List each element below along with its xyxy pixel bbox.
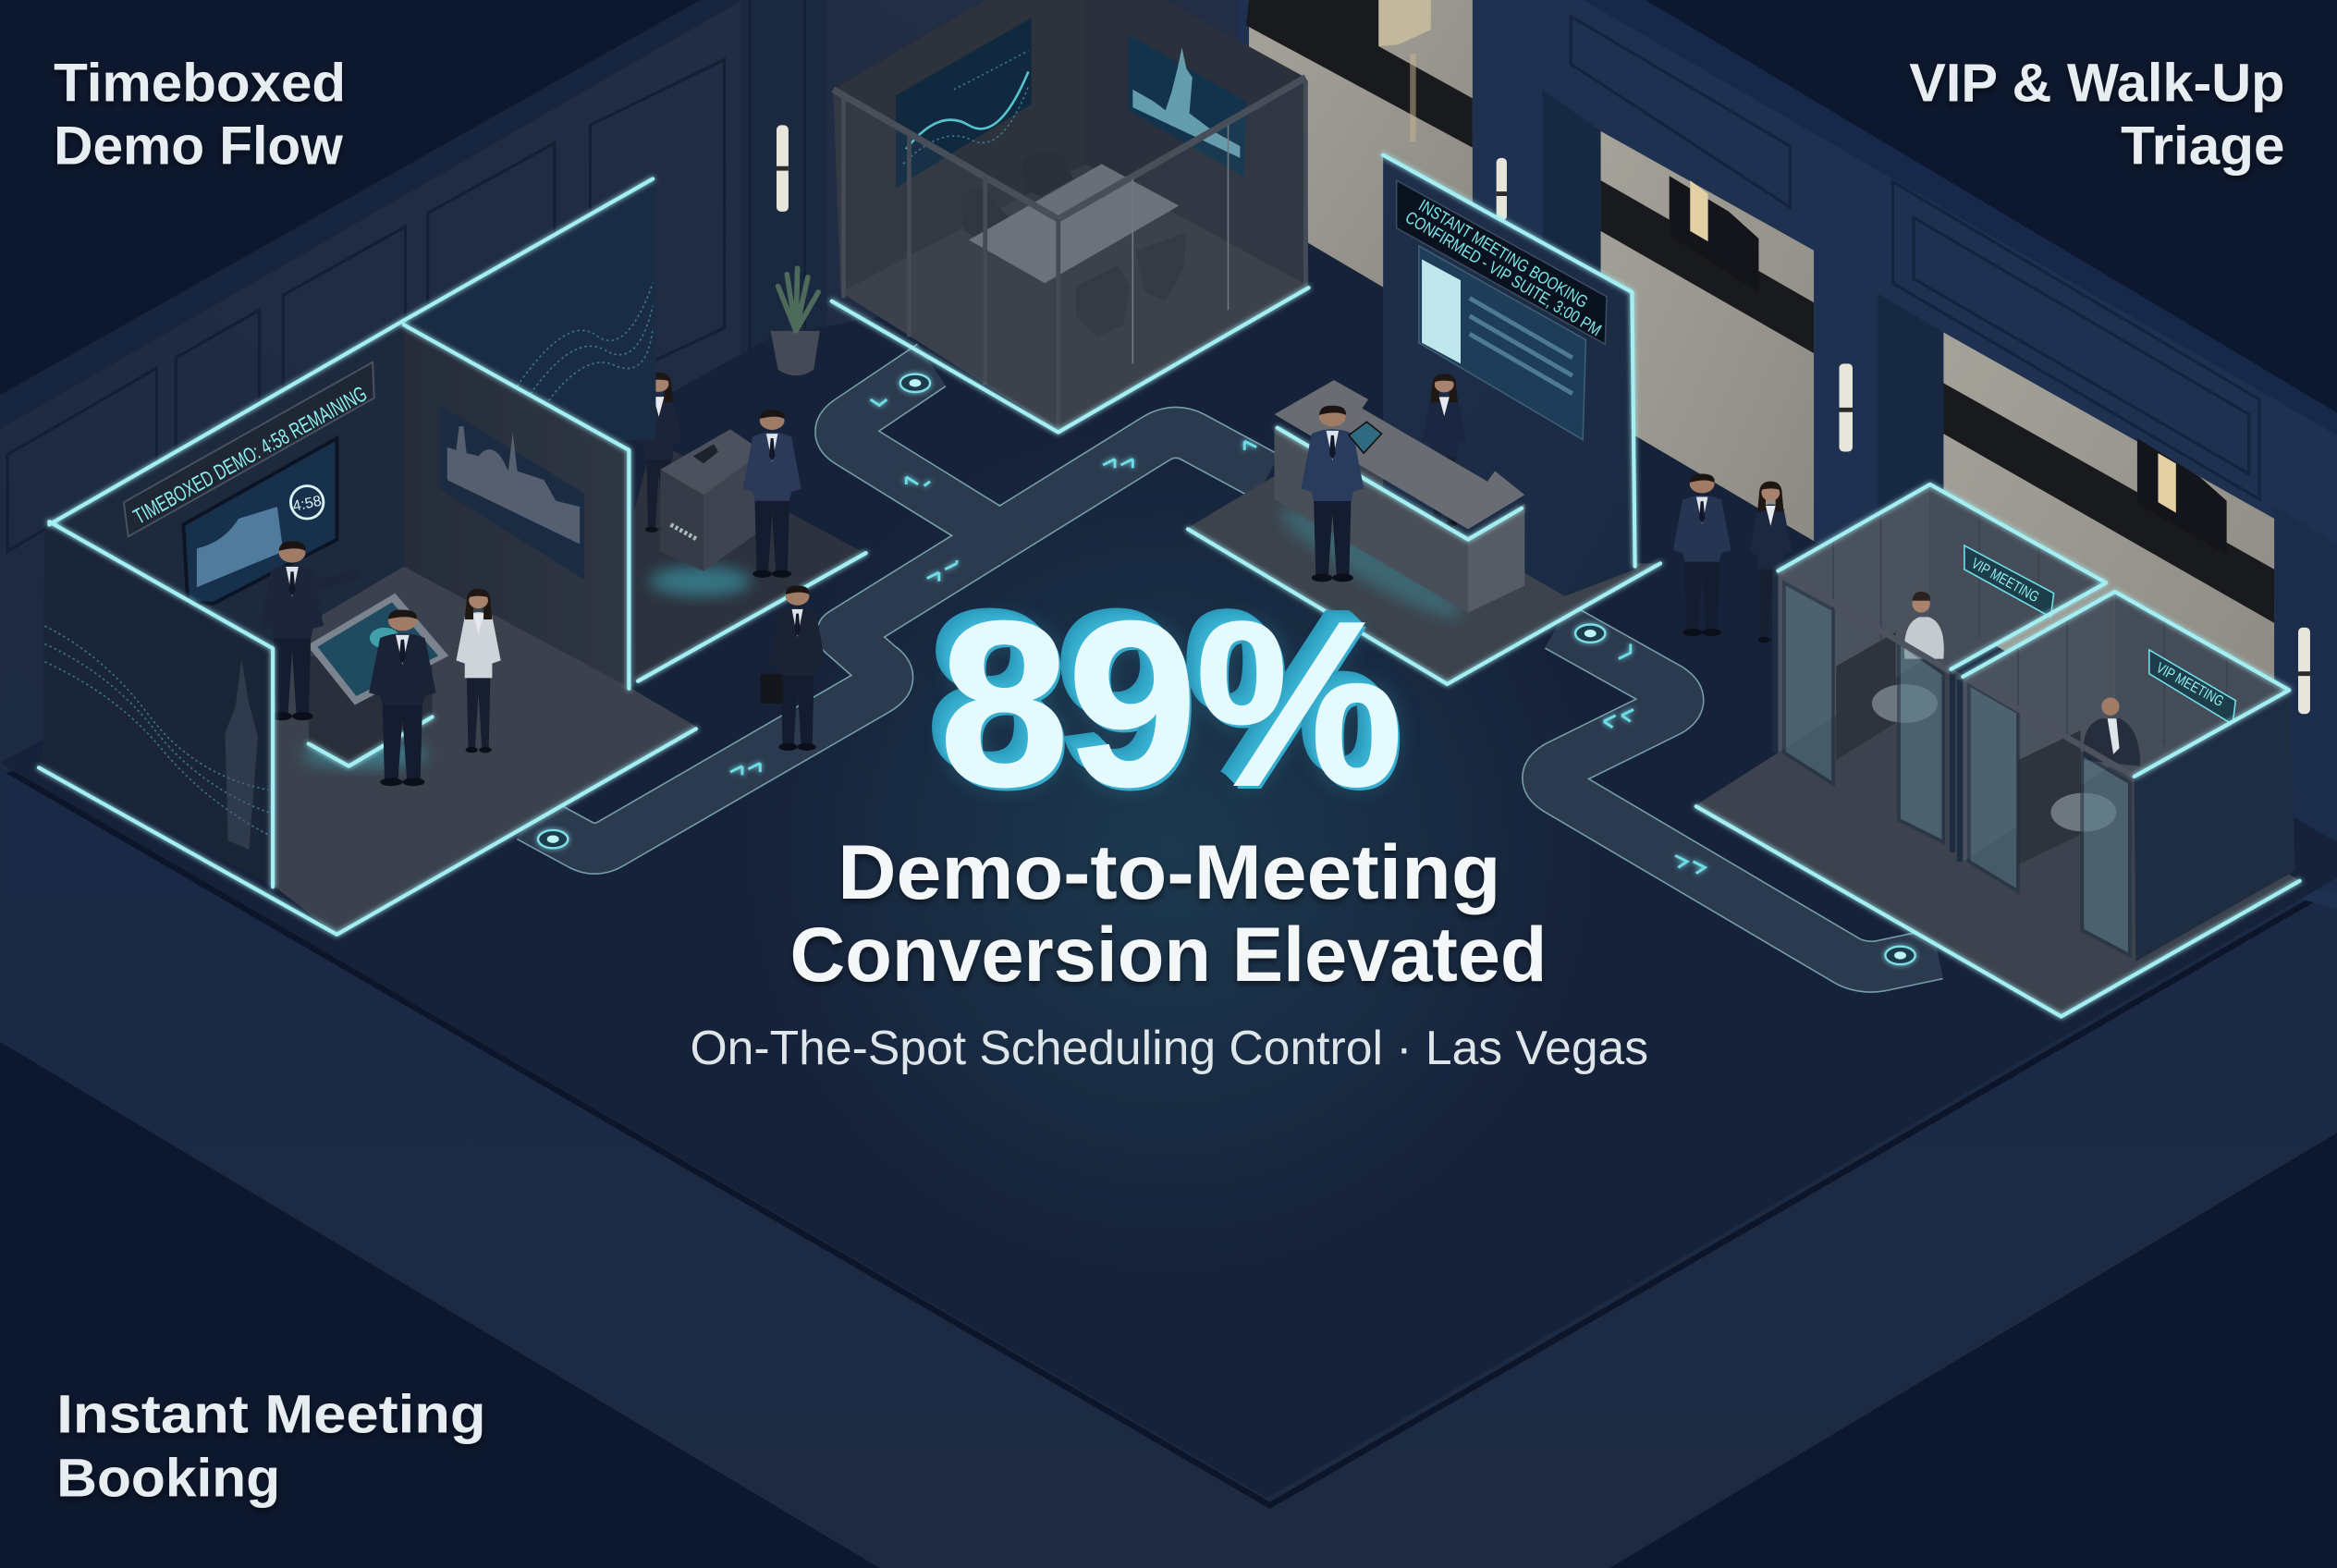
wall art: skyline <box>1128 34 1246 178</box>
headline <box>790 828 1547 998</box>
man with tablet <box>1301 406 1382 582</box>
interactive kiosk table <box>302 594 448 767</box>
opening: marble lobby B <box>1601 131 1814 626</box>
flow path left: demo to booking <box>529 365 1266 849</box>
reception counter <box>1272 380 1524 631</box>
glass door panels <box>1969 684 2130 955</box>
icon: potted plant <box>771 268 820 375</box>
center glow <box>641 402 1699 1297</box>
headline: Demo-to-Meeting <box>838 828 1501 915</box>
label: VIP and walk-up triage: Triage <box>2121 116 2285 176</box>
icon: path node start <box>538 830 568 848</box>
arrows on left path <box>730 399 1256 775</box>
outer floor band <box>0 753 2337 1568</box>
wall art: wave <box>896 18 1032 188</box>
two people waiting <box>1673 473 1792 643</box>
booth table <box>1872 684 1938 723</box>
sign: booking confirmed: INSTANT MEETING BOOKING <box>1415 195 1592 312</box>
booth 2 <box>1960 592 2295 962</box>
conference table <box>969 164 1179 283</box>
screen with chart and timer <box>183 438 336 604</box>
station: VIP meeting booths <box>1696 484 2300 1016</box>
opening: marble lobby A <box>1246 0 1473 343</box>
seated guest <box>1904 592 1944 659</box>
label: instant meeting booking <box>56 1384 486 1509</box>
booth bench <box>1836 632 1896 760</box>
tall booking wall <box>1383 156 1635 596</box>
flow path right: booking to VIP booths <box>1548 624 1938 967</box>
woman visitor <box>456 589 501 753</box>
label: VIP and walk-up triage <box>1909 54 2285 176</box>
glowing edges <box>39 178 696 935</box>
icon: path node glass room <box>900 374 930 392</box>
partition wall <box>404 326 629 687</box>
station: reception desk <box>633 373 867 682</box>
booth bench <box>2018 730 2081 864</box>
screen with chart and timer: 4:58 <box>291 493 323 515</box>
station: glass meeting room <box>832 0 1309 433</box>
booking screen <box>1419 246 1585 440</box>
man at kiosk <box>369 610 436 786</box>
big stat: 89 percent: 89% <box>939 572 1401 835</box>
sign: VIP meeting: VIP MEETING <box>1968 555 2042 606</box>
back wall left <box>0 0 1252 775</box>
left outer wall <box>42 524 273 886</box>
arrows on right path <box>1604 643 1705 874</box>
woman behind desk <box>635 373 682 533</box>
booth 1 <box>1775 484 2106 852</box>
wall sconces <box>777 125 2310 714</box>
subtitle: On-The-Spot Scheduling Control · Las Vegas <box>690 1021 1648 1074</box>
man at desk <box>743 410 801 578</box>
label: instant meeting booking: Booking <box>56 1449 280 1509</box>
label: timeboxed demo flow: Timeboxed <box>54 54 346 114</box>
presenter <box>261 541 355 720</box>
sign: booking confirmed: CONFIRMED - VIP SUITE, 3:00 PM <box>1402 207 1605 339</box>
back wall right with openings <box>1237 0 2337 909</box>
headline: Conversion Elevated <box>790 911 1547 998</box>
label: timeboxed demo flow <box>54 54 346 176</box>
station: timeboxed demo <box>39 178 698 935</box>
icon: path node booths <box>1885 947 1915 964</box>
opening: marble lobby C <box>1943 333 2274 835</box>
walking man with briefcase <box>760 585 826 751</box>
label: instant meeting booking: Instant Meeting <box>56 1384 486 1444</box>
glass frame <box>833 78 1305 219</box>
pillar shaded faces <box>1543 90 2337 894</box>
glass door panels <box>1784 582 1943 842</box>
back wall with wave panel <box>406 178 655 447</box>
framed skyline art <box>440 406 584 580</box>
booth table <box>2050 793 2116 832</box>
label: timeboxed demo flow: Demo Flow <box>54 116 344 176</box>
sign: timeboxed demo remaining <box>124 362 374 536</box>
chairs front <box>1076 232 1186 337</box>
sign: VIP meeting: VIP MEETING <box>2153 659 2227 710</box>
desk <box>660 429 763 570</box>
label: VIP and walk-up triage: VIP & Walk-Up <box>1909 54 2285 114</box>
station: instant meeting booking <box>1188 155 1660 684</box>
icon: path node kiosk <box>1575 624 1605 643</box>
chairs rear <box>961 152 1073 248</box>
seated executive <box>2083 697 2140 766</box>
woman behind counter <box>1422 374 1466 527</box>
solid side panel <box>2135 690 2295 962</box>
sign: timeboxed demo remaining: TIMEBOXED DEMO: 4:58 REMAINING <box>129 381 371 529</box>
